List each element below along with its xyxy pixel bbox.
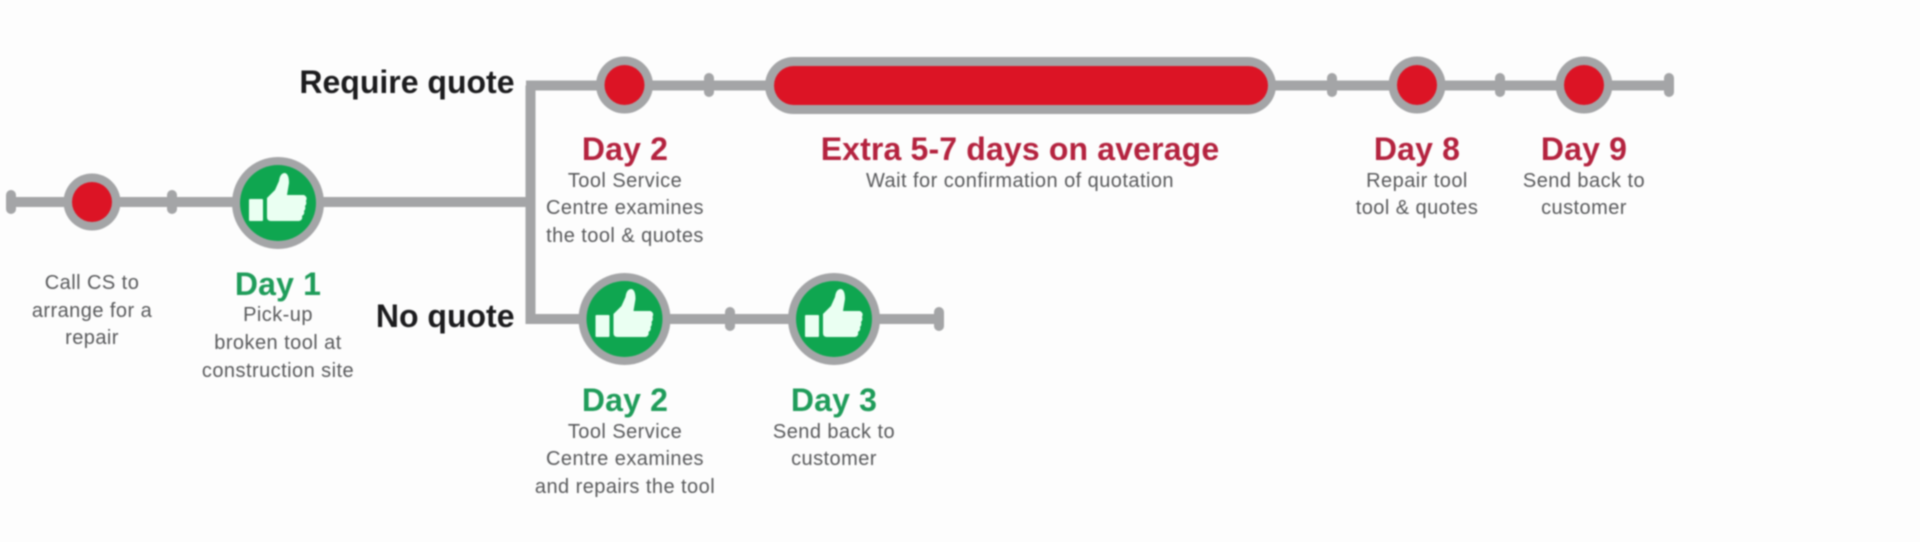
red waiting bar	[765, 57, 1276, 114]
text: extra wait: Extra 5-7 days on average	[821, 131, 1219, 167]
text: day 1: Day 1	[235, 266, 321, 302]
require quote line	[530, 73, 1674, 97]
icon: thumbs up no-quote day 3	[788, 273, 880, 365]
icon: red dot day 2	[596, 56, 653, 114]
text: call CS: Call CS to	[45, 272, 139, 294]
icon: thumbs up no-quote day 2	[578, 273, 670, 365]
first line: call and pick-up stage	[6, 190, 526, 214]
text: day 1: construction site	[202, 360, 354, 382]
text: day 9: Send back to	[1523, 170, 1645, 192]
text: no quote day 3	[773, 382, 895, 470]
icon: red dot day 9	[1556, 56, 1612, 114]
text: day 9: Day 9	[1541, 131, 1627, 167]
no quote line	[530, 307, 944, 331]
text: call CS: arrange for a	[32, 300, 153, 322]
text: day 1: broken tool at	[214, 332, 342, 354]
text: require quote day 2: Tool Service	[568, 170, 682, 192]
text: no quote day 2: Tool Service	[568, 421, 682, 443]
text: no quote day 2	[535, 382, 715, 498]
text: no quote day 3: Send back to	[773, 421, 895, 443]
text: day 8: Repair tool	[1366, 170, 1468, 192]
text: require quote day 2: Day 2	[582, 131, 668, 167]
heading: no quote: No quote	[376, 298, 514, 334]
text: require quote day 2: Centre examines	[546, 197, 704, 219]
text: day 9	[1523, 131, 1645, 219]
text: no quote day 2: and repairs the tool	[535, 476, 715, 498]
heading: require quote: Require quote	[299, 64, 514, 100]
text: no quote day 3: customer	[791, 448, 877, 470]
text: day 8: Day 8	[1374, 131, 1460, 167]
icon: red dot day 8	[1388, 56, 1446, 114]
text: extra wait: Wait for confirmation of quotation	[866, 170, 1174, 192]
text: call CS: repair	[65, 327, 119, 349]
text: no quote day 3: Day 3	[791, 382, 877, 418]
text: require quote day 2	[546, 131, 704, 247]
text: day 8	[1356, 131, 1478, 219]
text: require quote day 2: the tool & quotes	[546, 225, 704, 247]
branch connector	[526, 86, 600, 319]
icon: thumbs up day 1	[232, 157, 324, 249]
text: no quote day 2: Centre examines	[546, 448, 704, 470]
text: day 9: customer	[1541, 197, 1627, 219]
text: day 1	[202, 266, 354, 382]
text: day 1: Pick-up	[243, 304, 313, 326]
icon: red dot call	[64, 174, 120, 230]
text: day 8: tool & quotes	[1356, 197, 1478, 219]
text: extra wait	[821, 131, 1219, 192]
text: no quote day 2: Day 2	[582, 382, 668, 418]
text: call CS	[32, 272, 153, 349]
